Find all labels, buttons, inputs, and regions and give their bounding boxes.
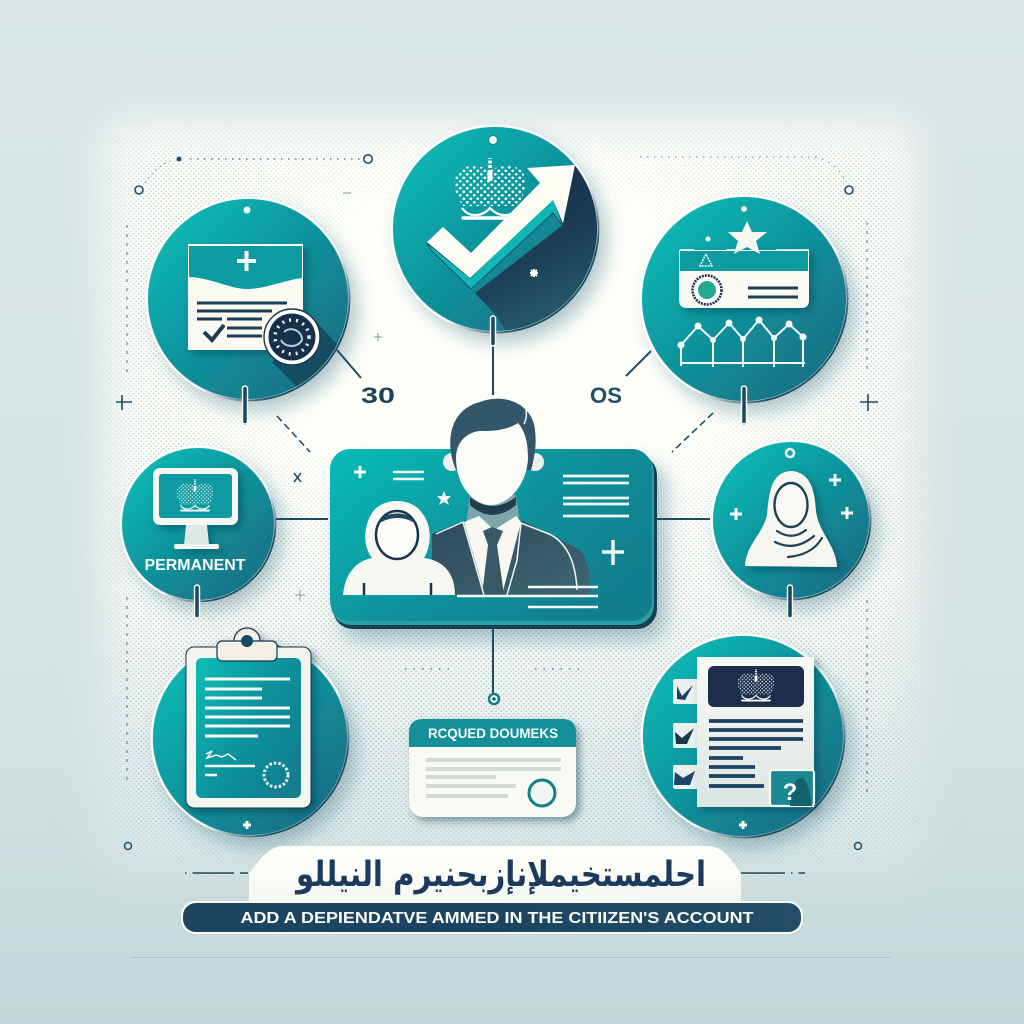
connector lines <box>197 316 790 693</box>
icon: check chips <box>673 679 699 789</box>
node: connector ring <box>489 694 499 704</box>
icon: crown <box>454 158 526 218</box>
label: 30: 30 <box>361 383 395 408</box>
circle: ID card and chart <box>640 196 848 424</box>
icon: monitor <box>153 468 238 549</box>
circle: hijab dependent <box>712 440 870 618</box>
label: OS: OS <box>590 383 622 408</box>
icon: photo with question mark: ? <box>783 779 797 806</box>
panel: required documents card <box>409 719 576 817</box>
icon: form document <box>188 244 303 350</box>
icon: document page <box>697 657 814 807</box>
circle: clipboard <box>152 628 348 836</box>
icon: ID card <box>679 250 809 308</box>
panel: central ID card <box>330 398 657 629</box>
icon: clipboard <box>186 628 311 808</box>
circle: application form with gauge <box>146 198 350 424</box>
icon: photo with question mark <box>770 770 814 806</box>
circle: permanent monitor <box>120 446 276 618</box>
circle: official document <box>642 634 844 838</box>
icon: gauge <box>264 309 320 365</box>
figure: adult in suit <box>432 398 590 595</box>
subtitle pill: ADD A DEPIENDATVE AMMED IN THE CITIIZEN'S ACCOUNT <box>240 910 754 927</box>
card lines and marks <box>354 466 629 565</box>
heading: Arabic title: احلمستخيملإنإزبحنيرم النيللو <box>294 855 706 895</box>
circle: approval check and arrow <box>392 126 620 350</box>
decorative dotted frame markers <box>116 155 878 850</box>
label: card heading: RCQUED DOUMEKS <box>428 725 558 741</box>
subtitle pill <box>182 902 802 933</box>
icon: check arrow <box>427 165 575 289</box>
icon: star <box>728 221 767 254</box>
line chart <box>678 316 806 367</box>
figure: child in hood <box>343 501 455 595</box>
title banner <box>182 846 805 933</box>
icon: veiled figure <box>745 471 837 567</box>
label: PERMANENT: PERMANENT <box>144 557 246 574</box>
